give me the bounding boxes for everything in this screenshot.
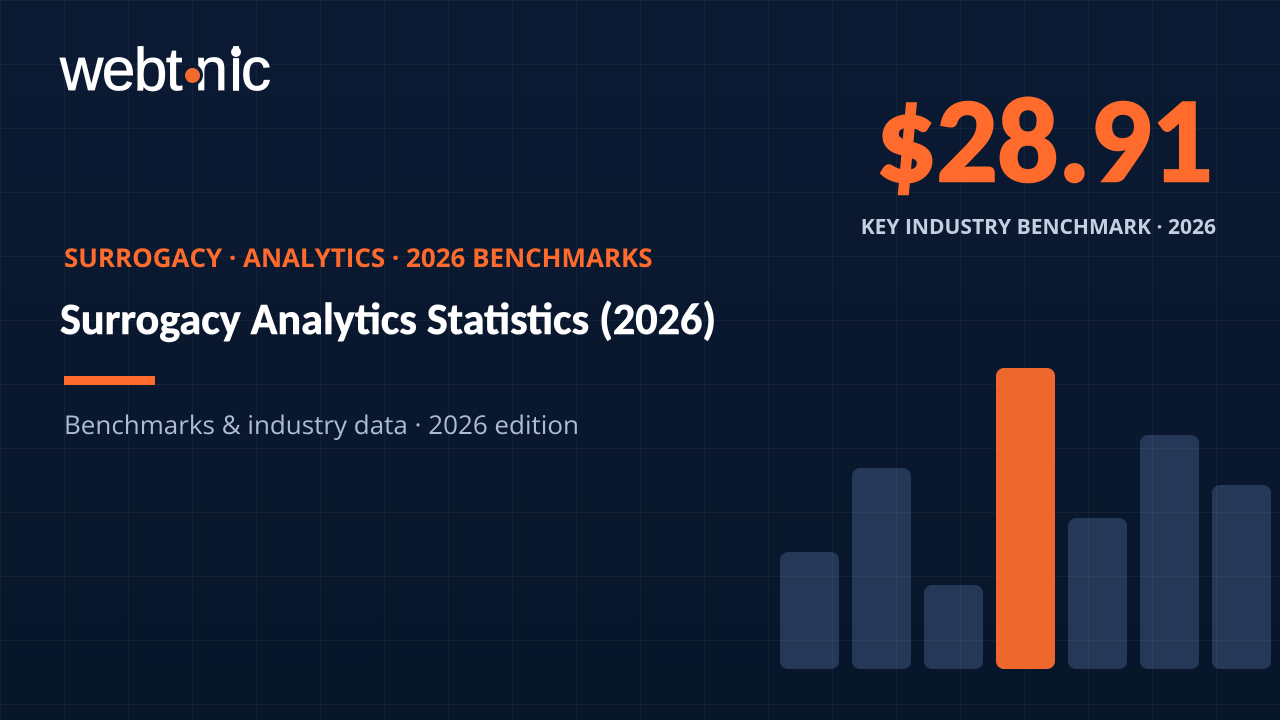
icon: dot halo [181, 64, 203, 86]
logo: webtonic: webt [60, 36, 181, 103]
icon: round i dot [231, 47, 241, 57]
bar 4 highlighted [996, 368, 1055, 669]
bar 6 [1140, 435, 1199, 669]
bar 1 [780, 552, 839, 669]
logo: webtonic: c [241, 36, 271, 103]
title: Surrogacy Analytics Statistics (2026) [60, 292, 716, 346]
big number caption: KEY INDUSTRY BENCHMARK · 2026 [861, 213, 1216, 241]
subtitle: Benchmarks & industry data · 2026 edition [64, 406, 579, 442]
icon: orange dot [184, 68, 200, 82]
eyebrow: SURROGACY · ANALYTICS · 2026 BENCHMARKS [64, 239, 653, 275]
logo: webtonic: n [194, 36, 228, 103]
bar 7 [1212, 485, 1271, 669]
logo: webtonic [59, 36, 271, 103]
bar 5 [1068, 518, 1127, 669]
logo: webtonic: i [229, 36, 243, 103]
bar 3 [924, 585, 983, 669]
accent rule [64, 376, 155, 385]
bar chart [780, 368, 1271, 669]
big number: $28.91 [875, 67, 1212, 214]
bar 2 [852, 468, 911, 669]
